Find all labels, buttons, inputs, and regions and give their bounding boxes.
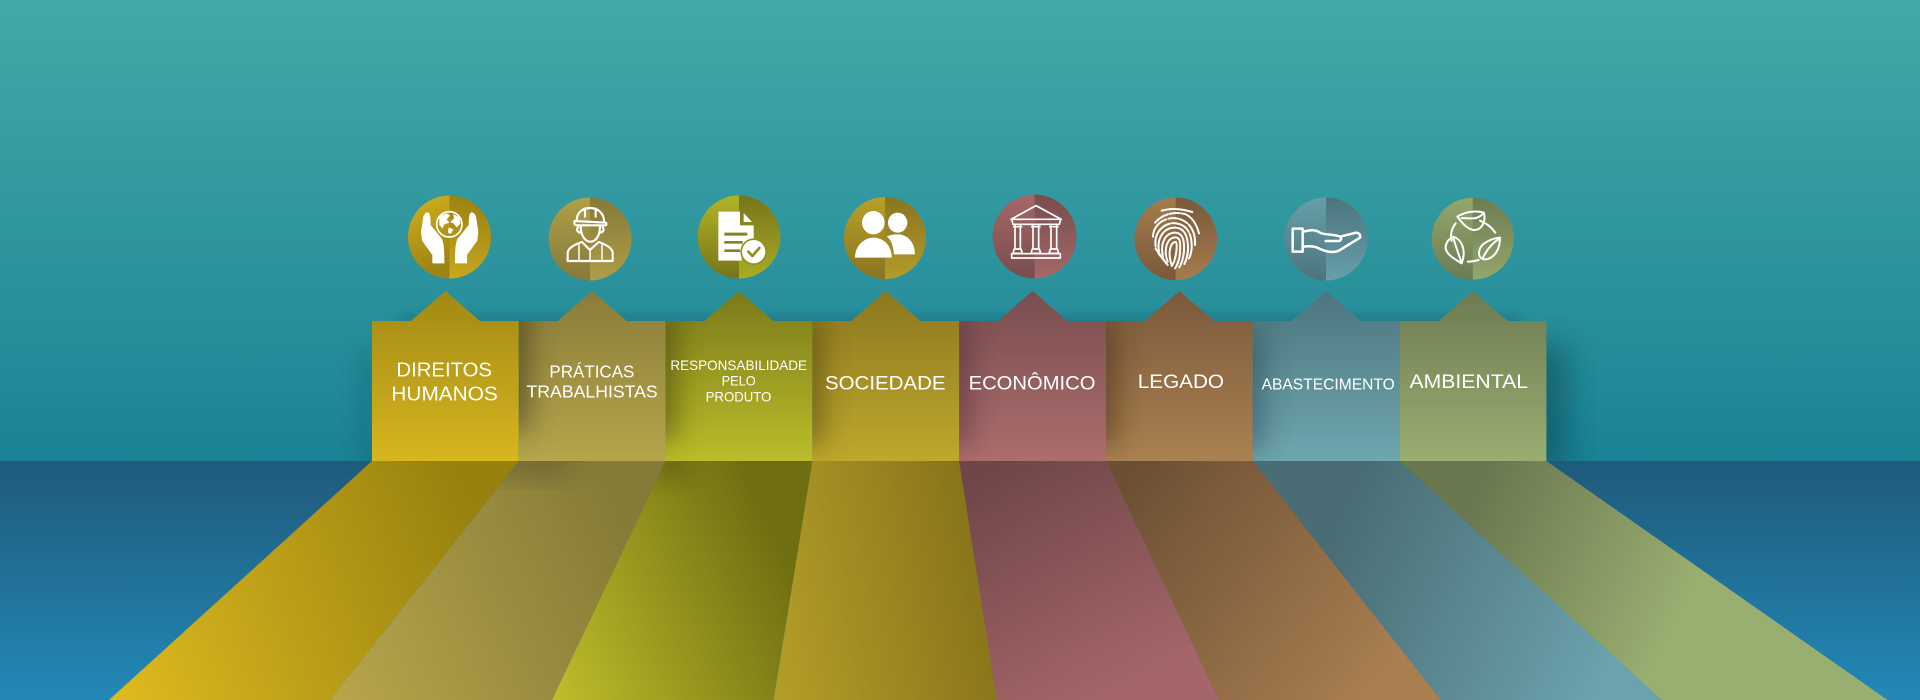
column: abastecimento — [1227, 198, 1662, 700]
pillar 2 — [519, 291, 666, 461]
label 3: PELO — [722, 374, 756, 389]
floor strip 3 — [552, 461, 812, 700]
strip 2 shading — [502, 461, 575, 486]
label 2: TRABALHISTAS — [526, 382, 658, 402]
label 2 — [526, 361, 658, 402]
icon: people — [844, 197, 926, 279]
icon: fingerprint — [1134, 198, 1217, 280]
floor strip 1 — [109, 461, 519, 700]
label 3: PRODUTO — [706, 389, 771, 404]
label 8: AMBIENTAL — [1410, 371, 1528, 393]
pillar 5 — [959, 291, 1106, 461]
pillar 4 shading — [812, 321, 838, 458]
pillar 7 shading — [1252, 324, 1275, 461]
column: economico — [933, 194, 1219, 700]
wall background — [0, 0, 1920, 462]
label 3 — [670, 358, 807, 404]
column: ambiental — [1400, 198, 1888, 700]
floor strip 8 — [1400, 461, 1888, 700]
label 1 — [391, 360, 498, 405]
pillar 6 — [1106, 291, 1253, 461]
label 1: HUMANOS — [391, 383, 498, 405]
floor strip 5 — [959, 461, 1219, 700]
column: sociedade — [774, 197, 997, 700]
pillar 6 shading — [1106, 321, 1129, 458]
label 7: ABASTECIMENTO — [1262, 376, 1395, 393]
strip 3 shading — [656, 461, 693, 485]
icon: classical building — [992, 194, 1076, 278]
column: direitos humanos — [109, 196, 519, 700]
floor strip 7 — [1253, 461, 1662, 700]
label 1: DIREITOS — [396, 360, 492, 382]
floor background — [0, 461, 1920, 700]
floor strip 4 — [774, 461, 997, 700]
pillar 7 — [1253, 291, 1400, 461]
icon: construction worker — [548, 198, 631, 280]
floor strip 6 — [1106, 461, 1441, 700]
label 2: PRÁTICAS — [549, 361, 634, 381]
label 3: RESPONSABILIDADE — [670, 358, 807, 373]
cast shadow right of columns — [1546, 334, 1579, 461]
label 6: LEGADO — [1138, 371, 1224, 393]
pillar 1 — [372, 291, 519, 461]
cast shadow left of columns — [362, 359, 372, 455]
floor strip 2 — [330, 461, 666, 700]
label 5: ECONÔMICO — [969, 371, 1096, 394]
column: praticas trabalhistas — [330, 198, 666, 700]
pillar 8 — [1400, 291, 1546, 461]
icon: recycling leaves — [1432, 198, 1514, 280]
pillar 4 — [812, 291, 959, 461]
column: responsabilidade pelo produto — [552, 196, 812, 700]
icon: hands holding globe — [408, 196, 491, 278]
pillar 3 shading — [666, 321, 692, 454]
pillar 5 shading — [959, 321, 982, 458]
label 4: SOCIEDADE — [825, 372, 946, 394]
pillar 3 — [666, 291, 812, 461]
column: legado — [1080, 198, 1441, 700]
pillar 2 shading — [518, 321, 544, 444]
icon: document with check — [697, 196, 780, 278]
cast shadow above columns — [400, 316, 1520, 328]
icon: open hand — [1284, 198, 1367, 280]
